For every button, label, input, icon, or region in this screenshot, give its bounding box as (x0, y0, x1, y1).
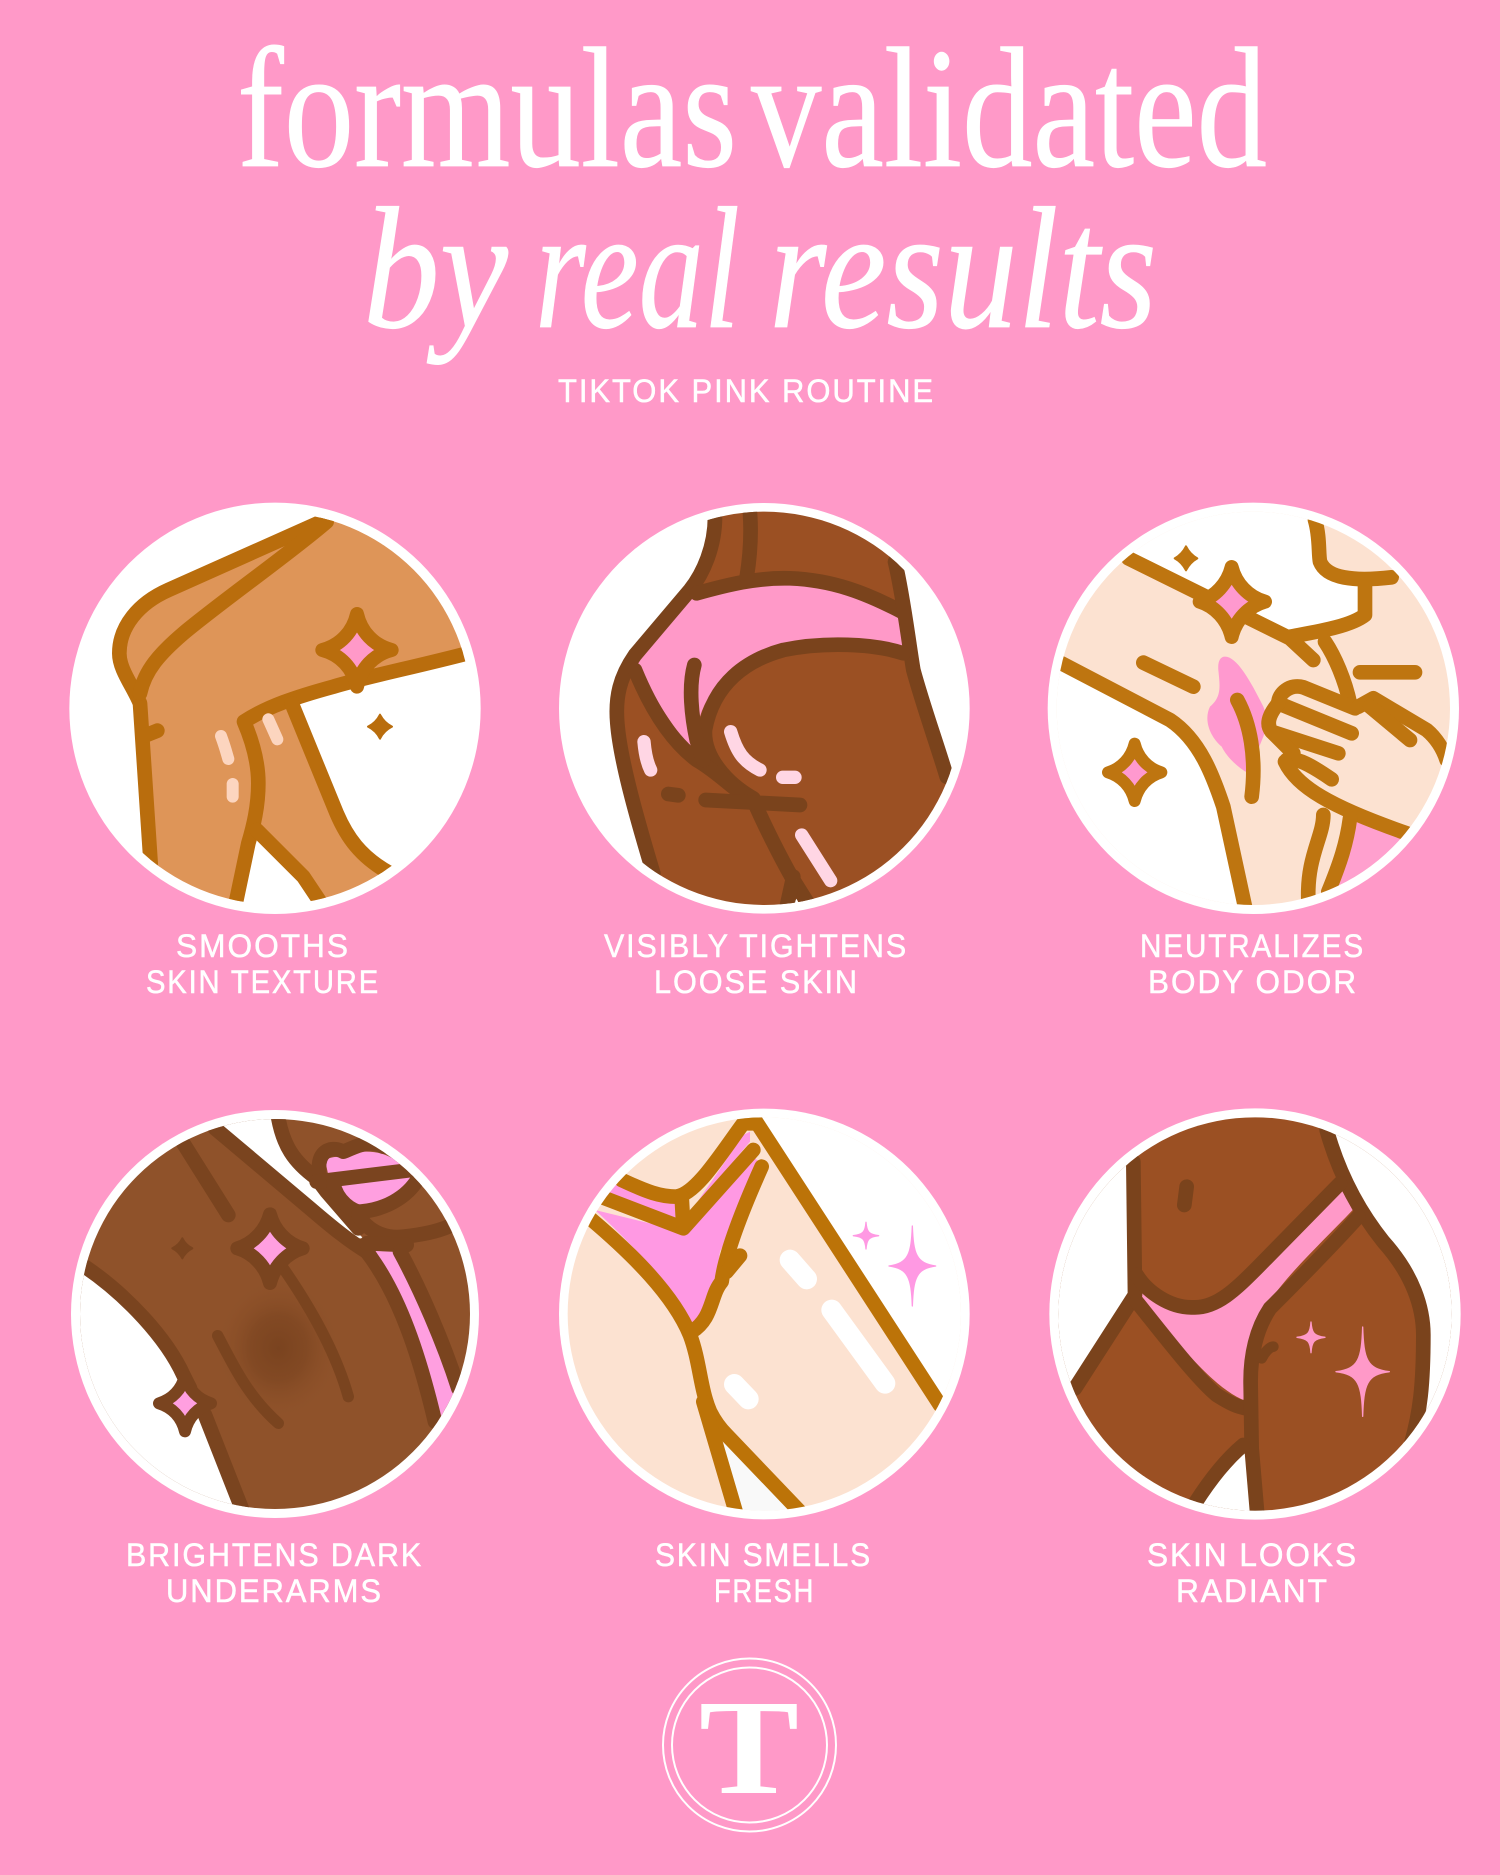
title line 2: by (363, 172, 509, 365)
title line 2 (363, 172, 1157, 365)
title line 2: results (769, 172, 1157, 365)
label: smooths skin texture (146, 928, 380, 1000)
panel: visibly tightens loose skin (559, 490, 973, 1000)
icon: bikini line (559, 1095, 973, 1528)
panel: smooths skin texture (69, 502, 481, 994)
panel: brightens dark underarms (50, 1095, 479, 1609)
logo (663, 1658, 836, 1832)
panel: skin smells fresh (559, 1095, 973, 1609)
label: smooths skin texture: SKIN TEXTURE (146, 964, 380, 1000)
icon: knee (69, 502, 481, 914)
label: skin looks radiant: RADIANT (1176, 1573, 1329, 1609)
title line 1: formulas (237, 14, 737, 204)
label: neutralizes body odor (1140, 928, 1365, 1000)
panel: skin looks radiant (1030, 1095, 1463, 1609)
label: smooths skin texture: SMOOTHS (176, 928, 350, 964)
label: brightens dark underarms: BRIGHTENS DARK (126, 1537, 423, 1573)
subtitle: TIKTOK PINK ROUTINE (558, 373, 935, 409)
title (237, 14, 1267, 365)
label: skin smells fresh (655, 1537, 872, 1609)
panel: neutralizes body odor (1030, 490, 1459, 1000)
icon: buttocks (559, 490, 973, 923)
logo letter T: T (699, 1673, 799, 1823)
label: skin smells fresh: FRESH (714, 1573, 815, 1609)
label: visibly tightens loose skin (604, 928, 908, 1000)
label: visibly tightens loose skin: VISIBLY TIGHTENS (604, 928, 908, 964)
title line 1 (237, 14, 1267, 204)
title line 2: real (535, 172, 740, 365)
icon: dark underarm (71, 1110, 479, 1518)
icon: underarm with hand (1030, 490, 1459, 923)
label: skin looks radiant (1147, 1537, 1358, 1609)
title line 1: validated (751, 14, 1267, 204)
label: neutralizes body odor: BODY ODOR (1148, 964, 1358, 1000)
label: brightens dark underarms (126, 1537, 423, 1609)
label: skin smells fresh: SKIN SMELLS (655, 1537, 872, 1573)
label: skin looks radiant: SKIN LOOKS (1147, 1537, 1358, 1573)
label: brightens dark underarms: UNDERARMS (166, 1573, 383, 1609)
label: visibly tightens loose skin: LOOSE SKIN (654, 964, 859, 1000)
icon: hips (1030, 1095, 1463, 1525)
label: neutralizes body odor: NEUTRALIZES (1140, 928, 1365, 964)
